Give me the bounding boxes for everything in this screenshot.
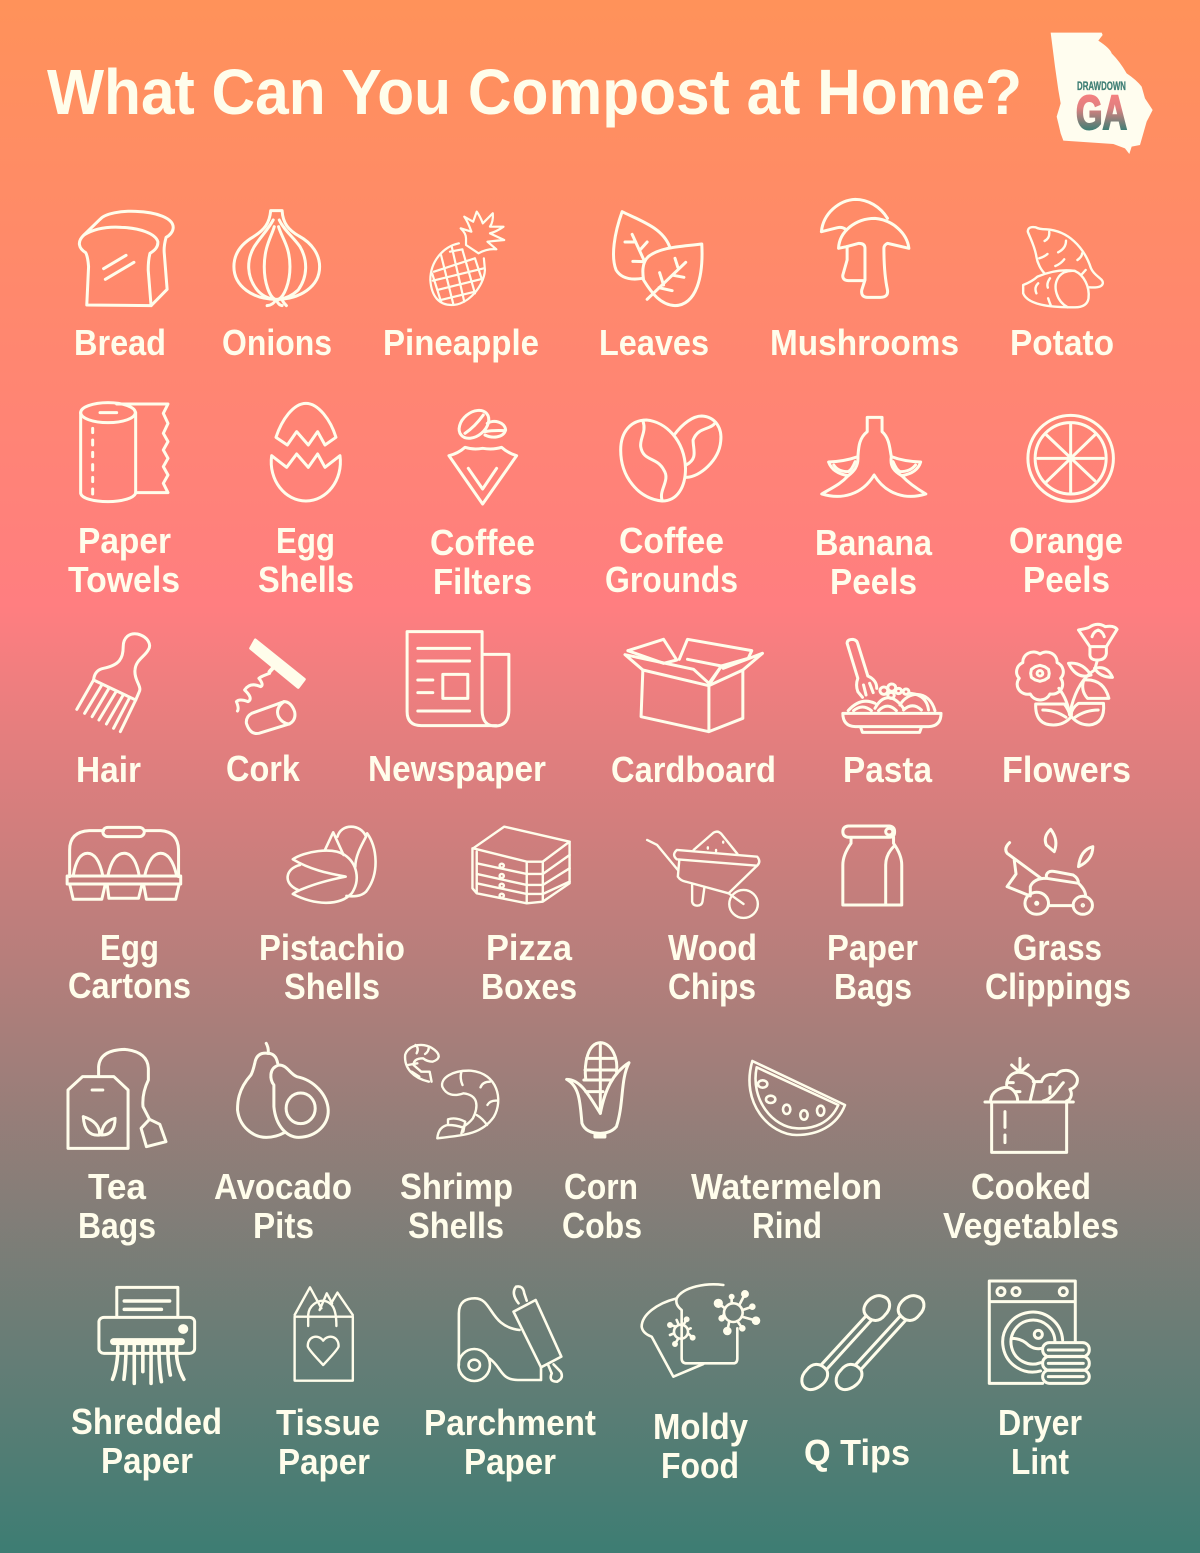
logo: Drawdown GA state map: DRAWDOWN bbox=[1077, 79, 1126, 93]
item: Wood Chips bbox=[647, 832, 759, 1007]
item: Pasta bbox=[843, 639, 941, 790]
item: Newspaper: Newspaper bbox=[368, 748, 546, 789]
item: Banana Peels: Peels bbox=[830, 561, 917, 602]
item: Shrimp Shells: Shrimp bbox=[400, 1166, 513, 1207]
item: Egg Cartons bbox=[67, 827, 191, 1006]
item: Orange Peels: Peels bbox=[1023, 559, 1110, 600]
item: Cardboard: Cardboard bbox=[611, 749, 776, 790]
item: Pistachio Shells: Pistachio bbox=[259, 927, 405, 968]
item: Egg Cartons: Cartons bbox=[68, 965, 191, 1006]
item: Pistachio Shells: Shells bbox=[284, 966, 380, 1007]
item: Parchment Paper bbox=[424, 1286, 596, 1482]
item: Watermelon Rind: Rind bbox=[752, 1205, 822, 1246]
item: Cardboard bbox=[611, 639, 776, 790]
item: Potato: Potato bbox=[1010, 322, 1114, 363]
item: Potato bbox=[1010, 227, 1114, 363]
item: Newspaper bbox=[368, 632, 546, 789]
item: Bread bbox=[74, 211, 173, 363]
item: Q Tips bbox=[802, 1296, 924, 1473]
item: Onions: Onions bbox=[222, 322, 332, 363]
item: Pasta: Pasta bbox=[843, 749, 933, 790]
item: Tea Bags: Bags bbox=[78, 1205, 156, 1246]
item: Grass Clippings bbox=[985, 829, 1131, 1007]
item: Egg Shells bbox=[258, 403, 354, 600]
item: Paper Bags: Bags bbox=[834, 966, 912, 1007]
item: Coffee Filters: Filters bbox=[433, 561, 532, 602]
item: Wood Chips: Chips bbox=[668, 966, 756, 1007]
item: Banana Peels: Banana bbox=[815, 522, 933, 563]
item: Flowers bbox=[1002, 624, 1131, 790]
item: Coffee Grounds: Grounds bbox=[605, 559, 738, 600]
item: Banana Peels bbox=[815, 417, 933, 602]
item: Avocado Pits bbox=[214, 1043, 352, 1246]
item: Avocado Pits: Avocado bbox=[214, 1166, 352, 1207]
item: Mushrooms bbox=[770, 199, 959, 363]
item: Moldy Food: Food bbox=[661, 1445, 739, 1486]
item: Tea Bags bbox=[68, 1049, 166, 1246]
item: Pineapple: Pineapple bbox=[383, 322, 539, 363]
item: Pizza Boxes: Boxes bbox=[481, 966, 577, 1007]
item: Cork: Cork bbox=[226, 748, 301, 789]
item: Parchment Paper: Parchment bbox=[424, 1402, 596, 1443]
item: Dryer Lint: Dryer bbox=[998, 1402, 1082, 1443]
item: Pistachio Shells bbox=[259, 827, 405, 1007]
item: Paper Towels: Towels bbox=[68, 559, 180, 600]
item: Moldy Food: Moldy bbox=[653, 1406, 748, 1447]
item: Pineapple bbox=[383, 212, 539, 363]
item: Orange Peels bbox=[1009, 415, 1123, 600]
item: Q Tips: Q Tips bbox=[804, 1432, 910, 1473]
item: Cooked Vegetables bbox=[943, 1058, 1119, 1246]
logo: Drawdown GA state map bbox=[1051, 33, 1153, 154]
item: Onions bbox=[222, 211, 332, 363]
item: Corn Cobs bbox=[562, 1043, 642, 1246]
item: Paper Bags: Paper bbox=[827, 927, 918, 968]
item: Pizza Boxes: Pizza bbox=[486, 927, 573, 968]
item: Tissue Paper: Paper bbox=[278, 1441, 370, 1482]
item: Parchment Paper: Paper bbox=[464, 1441, 556, 1482]
item: Orange Peels: Orange bbox=[1009, 520, 1123, 561]
item: Paper Bags bbox=[827, 826, 918, 1007]
item: Mushrooms: Mushrooms bbox=[770, 322, 959, 363]
item: Moldy Food bbox=[642, 1284, 759, 1486]
item: Dryer Lint: Lint bbox=[1011, 1441, 1069, 1482]
item: Pizza Boxes bbox=[472, 827, 577, 1007]
item: Egg Cartons: Egg bbox=[100, 927, 159, 968]
item: Cooked Vegetables: Vegetables bbox=[943, 1205, 1119, 1246]
item: Cork bbox=[226, 640, 304, 789]
item: Grass Clippings: Clippings bbox=[985, 966, 1131, 1007]
item: Shredded Paper: Shredded bbox=[71, 1401, 222, 1442]
item: Tea Bags: Tea bbox=[88, 1166, 147, 1207]
item: Tissue Paper bbox=[276, 1287, 380, 1482]
item: Leaves bbox=[599, 212, 709, 363]
item: Dryer Lint bbox=[989, 1281, 1089, 1482]
logo: Drawdown GA state map: GA bbox=[1076, 87, 1127, 140]
item: Shredded Paper bbox=[71, 1287, 222, 1481]
item: Shrimp Shells bbox=[400, 1045, 513, 1246]
item: Corn Cobs: Cobs bbox=[562, 1205, 642, 1246]
title: What Can You Compost at Home? bbox=[47, 56, 1022, 128]
item: Paper Towels: Paper bbox=[78, 520, 171, 561]
item: Egg Shells: Shells bbox=[258, 559, 354, 600]
item: Shrimp Shells: Shells bbox=[408, 1205, 504, 1246]
item: Watermelon Rind bbox=[691, 1061, 882, 1246]
item: Tissue Paper: Tissue bbox=[276, 1402, 380, 1443]
item: Coffee Grounds: Coffee bbox=[619, 520, 724, 561]
item: Egg Shells: Egg bbox=[276, 520, 335, 561]
item: Coffee Filters bbox=[430, 405, 535, 602]
item: Paper Towels bbox=[68, 403, 180, 600]
item: Hair bbox=[76, 634, 150, 790]
item: Avocado Pits: Pits bbox=[253, 1205, 314, 1246]
item: Bread: Bread bbox=[74, 322, 166, 363]
item: Coffee Filters: Coffee bbox=[430, 522, 535, 563]
item: Wood Chips: Wood bbox=[668, 927, 757, 968]
item: Flowers: Flowers bbox=[1002, 749, 1131, 790]
item: Cooked Vegetables: Cooked bbox=[971, 1166, 1091, 1207]
item: Coffee Grounds bbox=[605, 416, 738, 600]
item: Watermelon Rind: Watermelon bbox=[691, 1166, 882, 1207]
item: Leaves: Leaves bbox=[599, 322, 709, 363]
item: Grass Clippings: Grass bbox=[1013, 927, 1102, 968]
item: Corn Cobs: Corn bbox=[564, 1166, 638, 1207]
item: Hair: Hair bbox=[76, 749, 141, 790]
item: Shredded Paper: Paper bbox=[101, 1440, 193, 1481]
